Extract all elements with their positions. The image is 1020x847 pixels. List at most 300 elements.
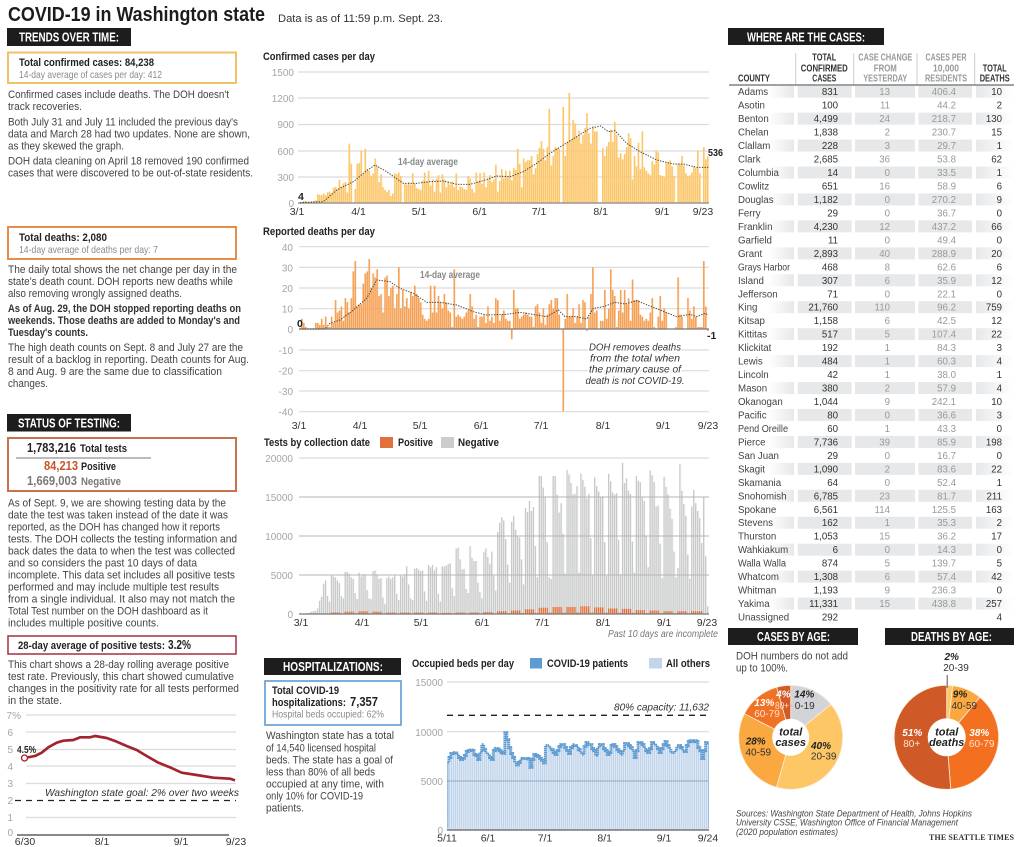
column: case change from yesterday: 8: [885, 262, 890, 273]
chart: reported deaths per day: 5/1: [413, 420, 427, 432]
chart: tests by collection date: 8/1: [596, 617, 610, 629]
column: total confirmed cases: 80: [827, 410, 839, 422]
chart: occupied beds per day: [415, 678, 718, 845]
note: cases by age: up to 100%.: [736, 662, 788, 674]
column: total confirmed cases: 11,331: [809, 599, 838, 610]
chart: occupied beds per day: 9/24: [698, 833, 718, 845]
chart: confirmed cases per day: 1500: [272, 68, 294, 79]
heading: trends over time: [7, 28, 131, 46]
column: case change from yesterday: 13: [879, 87, 890, 98]
donut chart: total deaths: 51%: [902, 728, 922, 739]
table header: TOTAL: [983, 64, 1007, 74]
heading: trends over time: TRENDS OVER TIME:: [19, 30, 119, 44]
column: case change from yesterday: 40: [879, 249, 891, 260]
chart title: confirmed cases: Confirmed cases per day: [263, 51, 376, 63]
column: total confirmed cases: 831: [822, 87, 838, 98]
chart title: reported deaths: Reported deaths per day: [263, 226, 376, 238]
column: case change from yesterday: 9: [885, 397, 890, 408]
county names: Adams: [738, 87, 768, 98]
donut chart: total cases: 40%: [810, 741, 831, 752]
chart: occupied beds per day: 15000: [415, 678, 443, 689]
column: total confirmed cases: 1,158: [814, 316, 838, 327]
callout: testing totals: [8, 438, 236, 491]
callout: total hospitalizations: Hospital beds occupied: 62%: [272, 709, 384, 721]
text block: cases notes: data and March 28 had two updates. None are shown,: [8, 128, 250, 140]
county names: Clallam: [738, 141, 770, 152]
column: case change from yesterday: 6: [885, 316, 890, 327]
text block: deaths notes: The high death counts on Sept. 8 and July 27 are the: [8, 342, 243, 354]
callout: total hospitalizations: [265, 681, 401, 725]
column: case change from yesterday: 1: [885, 357, 890, 368]
column: total confirmed cases: 192: [822, 343, 838, 354]
county names: Island: [738, 276, 764, 287]
column: total deaths: 1: [997, 370, 1002, 381]
chart: reported deaths per day: 4/1: [353, 420, 367, 432]
chart: confirmed cases per day: 600: [277, 147, 294, 158]
column: cases per 10,000 residents: 438.8: [932, 599, 956, 610]
chart: confirmed cases per day: 5/1: [412, 206, 426, 218]
chart title and legend: tests: Tests by collection date: [264, 437, 370, 449]
column: cases per 10,000 residents: 14.3: [937, 545, 956, 556]
chart: confirmed cases per day: 536: [708, 147, 723, 159]
column: cases per 10,000 residents: 96.2: [937, 303, 956, 314]
column: total confirmed cases: 100: [822, 101, 839, 112]
column: cases per 10,000 residents: 43.3: [937, 424, 956, 435]
text block: testing notes: reported, as the DOH has changed how it reports: [8, 522, 220, 534]
callout: testing totals: Negative: [81, 476, 121, 488]
column: cases per 10,000 residents: 22.1: [937, 289, 956, 300]
column: total confirmed cases: 7,736: [814, 437, 838, 448]
text block: deaths notes: Tuesday's counts.: [8, 327, 88, 339]
text block: cases notes: as they skewed the graph.: [8, 140, 124, 152]
column: cases per 10,000 residents: 36.6: [937, 410, 956, 422]
county names: Garfield: [738, 235, 772, 246]
chart: reported deaths per day: 0: [287, 325, 293, 336]
county names: Ferry: [738, 208, 761, 219]
text block: deaths notes: As of Aug. 29, the DOH stopped reporting deaths on: [8, 303, 241, 315]
column: cases per 10,000 residents: 49.4: [937, 235, 957, 246]
column: total deaths: 198: [986, 437, 1002, 448]
column: cases per 10,000 residents: 58.9: [937, 182, 956, 192]
callout: testing totals: Positive: [81, 461, 116, 473]
chart: reported deaths per day: -20: [279, 367, 293, 378]
column: total deaths: 211: [987, 491, 1002, 502]
column: total deaths: 10: [991, 397, 1003, 408]
county names: Thurston: [738, 532, 776, 543]
chart: positivity rate line: 4: [7, 762, 13, 773]
date note: Data is as of 11:59 p.m. Sept. 23.: [278, 13, 443, 25]
chart: confirmed cases per day: 0: [288, 199, 294, 210]
chart: confirmed cases per day: 9/23: [693, 206, 713, 218]
column: cases per 10,000 residents: 29.7: [937, 141, 956, 152]
text block: testing notes: date the test was taken instead of the date it was: [8, 510, 228, 522]
sources: University CSSE, Washington Office of Financial Management: [736, 818, 958, 829]
column: total confirmed cases: 1,308: [814, 572, 838, 583]
chart: reported deaths per day: 7/1: [534, 420, 548, 432]
sources: [736, 809, 972, 838]
text block: cases notes: [8, 89, 253, 180]
chart: confirmed cases per day: 8/1: [593, 206, 608, 218]
column: total deaths: 15: [991, 128, 1002, 139]
column: total confirmed cases: 21,760: [808, 303, 839, 314]
column: case change from yesterday: 0: [885, 208, 891, 219]
chart: confirmed cases per day: 300: [277, 173, 294, 184]
column: total confirmed cases: 228: [822, 141, 838, 152]
text block: deaths notes: [7, 264, 249, 390]
column: total deaths: [986, 87, 1003, 623]
county names: Douglas: [738, 195, 774, 206]
county names: Grays Harbor: [738, 262, 791, 273]
chart: occupied beds per day: 8/1: [597, 833, 612, 845]
table header: COUNTY: [738, 74, 770, 85]
donut chart: total deaths: 38%: [969, 728, 989, 739]
text block: hospital notes: patients.: [266, 802, 304, 814]
column: total confirmed cases: [808, 87, 839, 623]
column: case change from yesterday: 1: [885, 518, 890, 529]
donut chart: total deaths: 40-59: [952, 701, 978, 712]
chart: reported deaths per day: -10: [279, 346, 293, 357]
column: case change from yesterday: 2: [885, 384, 890, 394]
column: case change from yesterday: 0: [885, 451, 891, 462]
heading: where are the cases: [728, 28, 884, 45]
column: case change from yesterday: [875, 87, 891, 610]
table header: TOTAL: [812, 53, 836, 64]
text block: deaths notes: also removing wrongly assigned deaths.: [8, 288, 182, 300]
column: case change from yesterday: 15: [879, 599, 890, 610]
column: total confirmed cases: 484: [822, 357, 839, 368]
column: case change from yesterday: 0: [885, 168, 891, 179]
chart: reported deaths per day: 0: [297, 318, 303, 330]
county names: Wahkiakum: [738, 545, 788, 556]
chart: reported deaths per day: from the total when: [590, 353, 680, 365]
text block: positivity note: test rate. Previously, this chart showed cumulative: [8, 671, 234, 683]
chart: occupied beds per day: 5/11: [437, 833, 457, 845]
chart: reported deaths per day: 20: [282, 284, 293, 295]
chart: reported deaths per day: death is not COVID-19.: [586, 375, 684, 387]
county names: Grant: [738, 249, 763, 260]
chart: tests by collection date: Past 10 days are incomplete: [608, 629, 718, 640]
callout: testing totals: Total tests: [80, 443, 127, 455]
chart: positivity rate line: 3: [7, 779, 13, 790]
county names: Benton: [738, 114, 769, 125]
column: total confirmed cases: 14: [827, 168, 839, 179]
column: total deaths: 0: [997, 586, 1003, 597]
chart: tests by collection date: [265, 454, 718, 640]
chart: reported deaths per day: 8/1: [596, 420, 610, 432]
column: cases per 10,000 residents: 236.3: [932, 586, 956, 597]
column: total deaths: 1: [997, 168, 1002, 179]
chart: occupied beds per day: 10000: [415, 728, 443, 739]
text block: deaths notes: result of a backlog in reporting. Death counts for Aug.: [8, 354, 249, 366]
column: total deaths: 163: [986, 505, 1002, 516]
text block: positivity note: This chart shows a 28-day rolling average positive: [8, 659, 229, 671]
chart: positivity rate line: 1: [7, 813, 13, 824]
county names: Kitsap: [738, 316, 765, 327]
chart: confirmed cases per day: [272, 68, 723, 218]
county names: Asotin: [738, 101, 765, 112]
callout: testing totals: 84,213: [44, 459, 78, 473]
column: cases per 10,000 residents: 38.0: [937, 370, 957, 381]
column: total confirmed cases: 29: [827, 451, 838, 462]
chart: reported deaths per day: -1: [707, 330, 716, 342]
column: total deaths: 6: [997, 182, 1002, 192]
chart title and legend: occupied beds: All others: [666, 658, 710, 670]
column: cases per 10,000 residents: 60.3: [937, 357, 956, 368]
column: case change from yesterday: 1: [885, 370, 890, 381]
column: total deaths: 4: [997, 384, 1003, 394]
chart title and legend: occupied beds: Occupied beds per day: [412, 658, 515, 670]
text block: hospital notes: less than 80% of all beds: [266, 766, 375, 778]
column: total confirmed cases: 1,053: [814, 532, 838, 543]
chart: reported deaths per day: 10: [282, 305, 293, 316]
chart: occupied beds per day: 7/1: [538, 833, 552, 845]
column: case change from yesterday: 0: [885, 545, 891, 556]
table row stripes: [729, 86, 1014, 621]
text block: deaths notes: state's death count. DOH reports new deaths while: [8, 276, 233, 288]
callout: 28-day average: 28-day average of positive tests:: [18, 640, 165, 652]
column: total confirmed cases: 162: [822, 518, 838, 529]
text block: hospital notes: only 10% for COVID-19: [266, 790, 363, 802]
chart: tests by collection date: 9/23: [697, 617, 717, 629]
text block: cases notes: track recoveries.: [8, 101, 82, 113]
column: total confirmed cases: 2,685: [814, 155, 838, 166]
chart title and legend: tests: Negative: [458, 437, 499, 449]
county names: [738, 87, 791, 623]
county names: Pend Oreille: [738, 424, 788, 435]
column: case change from yesterday: 2: [885, 128, 890, 139]
column: case change from yesterday: 1: [885, 424, 890, 435]
column: cases per 10,000 residents: 242.1: [932, 397, 956, 408]
chart: tests by collection date: 3/1: [294, 617, 308, 629]
donut chart: total cases: 14%: [794, 690, 814, 701]
text block: testing notes: As of Sept. 9, we are showing testing data by the: [8, 498, 226, 510]
county names: Snohomish: [738, 491, 786, 502]
chart: reported deaths per day: 3/1: [292, 420, 306, 432]
heading: hospitalizations: HOSPITALIZATIONS:: [283, 660, 383, 674]
county names: Stevens: [738, 518, 773, 529]
callout: 28-day average: 3.2%: [168, 638, 191, 652]
county names: Lewis: [738, 357, 763, 368]
column: total confirmed cases: 4,230: [814, 222, 839, 233]
column: case change from yesterday: 36: [879, 155, 890, 166]
column: cases per 10,000 residents: 42.5: [937, 316, 956, 327]
text block: testing notes: and so considers the past 10 days of data: [8, 558, 198, 570]
chart: reported deaths per day: 9/23: [698, 420, 718, 432]
county names: Jefferson: [738, 289, 778, 300]
note: cases by age: DOH numbers do not add: [736, 650, 848, 662]
chart: confirmed cases per day: 1200: [272, 94, 294, 105]
text block: testing notes: includes multiple positive counts.: [8, 618, 159, 630]
note: cases by age: [736, 650, 848, 674]
column: case change from yesterday: 11: [880, 101, 890, 112]
county names: King: [738, 303, 757, 314]
column: total deaths: 12: [991, 316, 1002, 327]
column: total deaths: 17: [991, 532, 1002, 543]
column: total deaths: 0: [997, 545, 1003, 556]
column: case change from yesterday: 6: [885, 276, 890, 287]
chart: confirmed cases per day: 7/1: [532, 206, 546, 218]
county names: Columbia: [738, 168, 780, 179]
sources: Sources: Washington State Department of Health, Johns Hopkins: [736, 809, 972, 820]
column: cases per 10,000 residents: 288.9: [932, 249, 956, 260]
column: cases per 10,000 residents: 62.6: [937, 262, 956, 273]
chart: tests by collection date: 5/1: [414, 617, 428, 629]
column: total deaths: 0: [997, 289, 1003, 300]
text block: testing notes: from a single individual. It also may not match the: [8, 594, 235, 606]
column: total deaths: 4: [997, 612, 1003, 624]
text block: hospital notes: Washington state has a total: [266, 730, 394, 742]
column: case change from yesterday: 6: [885, 572, 890, 583]
text block: deaths notes: The daily total shows the net change per day in the: [8, 264, 237, 276]
chart: reported deaths per day: the primary cause of: [589, 364, 682, 376]
donut chart: total cases: total: [779, 726, 803, 738]
heading: where are the cases: WHERE ARE THE CASES:: [747, 30, 865, 44]
column: cases per 10,000 residents: [932, 87, 957, 610]
column: total confirmed cases: 64: [827, 478, 839, 489]
chart: tests by collection date: 9/1: [657, 617, 671, 629]
column: cases per 10,000 residents: 218.7: [932, 114, 956, 125]
credit: The Seattle Times: THE SEATTLE TIMES: [929, 833, 1015, 842]
chart title and legend: occupied beds: [412, 658, 710, 670]
column: total deaths: 0: [997, 235, 1003, 246]
chart: tests by collection date: 0: [287, 610, 293, 621]
table header: 10,000: [933, 64, 959, 74]
county names: Lincoln: [738, 370, 769, 381]
chart title and legend: tests: Positive: [398, 437, 433, 449]
text block: deaths notes: changes.: [8, 378, 48, 390]
column: total deaths: 3: [997, 410, 1002, 422]
county names: Skagit: [738, 464, 765, 475]
column: total confirmed cases: 1,182: [814, 195, 838, 206]
text block: testing notes: Total Test number on the DOH dashboard as it: [8, 606, 208, 618]
column: total deaths: 20: [991, 249, 1003, 260]
column: total deaths: 22: [991, 330, 1002, 341]
text block: hospital notes: of 14,540 licensed hospital: [266, 742, 376, 754]
chart: reported deaths per day: DOH removes deaths: [589, 342, 682, 354]
column: total deaths: 6: [997, 262, 1002, 273]
column: cases per 10,000 residents: 57.9: [937, 384, 956, 394]
column: case change from yesterday: 5: [885, 559, 890, 570]
chart: reported deaths per day: 14-day average: [420, 270, 480, 281]
chart: reported deaths per day: 30: [282, 264, 293, 275]
text block: hospital notes: occupied at any time, with: [266, 778, 384, 790]
chart: positivity rate line: 6: [7, 728, 13, 739]
chart: positivity rate line: Washington state goal: 2% over two weeks: [45, 787, 240, 799]
text block: cases notes: Confirmed cases include deaths. The DOH doesn't: [8, 89, 229, 101]
heading: deaths by age: [885, 628, 1014, 645]
heading: cases by age: [728, 628, 858, 645]
callout: total confirmed cases: [8, 52, 236, 83]
column: cases per 10,000 residents: 35.3: [937, 518, 956, 529]
heading: hospitalizations: [264, 658, 401, 675]
text block: testing notes: back dates the data to when the test was collected: [8, 546, 235, 558]
column: cases per 10,000 residents: 44.2: [937, 101, 956, 112]
column: cases per 10,000 residents: 107.4: [932, 330, 957, 341]
chart: tests by collection date: 6/1: [475, 617, 489, 629]
column: total deaths: 42: [991, 572, 1002, 583]
chart: reported deaths per day: 40: [282, 243, 293, 254]
text block: testing notes: [8, 498, 237, 630]
column: cases per 10,000 residents: 125.5: [932, 505, 956, 516]
county names: Kittitas: [738, 330, 767, 341]
donut chart: total cases: cases: [775, 737, 806, 749]
column: cases per 10,000 residents: 81.7: [937, 491, 956, 502]
table header: CASES: [812, 74, 837, 85]
chart title and legend: tests: [264, 437, 499, 449]
column: case change from yesterday: 9: [885, 586, 890, 597]
column: case change from yesterday: 23: [879, 491, 890, 502]
column: total confirmed cases: 468: [822, 262, 838, 273]
chart: occupied beds per day: 9/1: [657, 833, 671, 845]
table header: CASES PER: [926, 53, 967, 64]
chart: reported deaths per day: [279, 243, 718, 432]
chart: tests by collection date: 20000: [265, 454, 293, 465]
column: case change from yesterday: 3: [885, 141, 890, 152]
column: total deaths: 2: [997, 101, 1002, 112]
column: case change from yesterday: 110: [875, 303, 891, 314]
column: total confirmed cases: 651: [822, 182, 838, 192]
donut chart: total cases: 13%: [754, 698, 774, 709]
county names: Franklin: [738, 222, 772, 233]
column: total deaths: 4: [997, 357, 1003, 368]
column: total confirmed cases: 60: [827, 424, 839, 435]
donut chart: total cases: 0-19: [795, 701, 815, 712]
column: total confirmed cases: 380: [822, 384, 839, 394]
column: case change from yesterday: 0: [885, 235, 891, 246]
column: total confirmed cases: 11: [828, 235, 838, 246]
callout: total deaths: [8, 227, 236, 259]
table header: CASE CHANGE: [858, 53, 913, 64]
donut chart: total deaths: total: [935, 726, 959, 738]
text block: positivity note: in the state.: [8, 695, 62, 707]
table header: CONFIRMED: [801, 64, 848, 74]
donut chart: total deaths: [894, 652, 999, 789]
donut chart: total cases: 80+: [775, 701, 789, 712]
column: case change from yesterday: 0: [885, 410, 891, 422]
column: total deaths: 0: [997, 451, 1003, 462]
donut chart: total cases: 40-59: [746, 748, 772, 759]
chart: reported deaths per day: 9/1: [656, 420, 670, 432]
chart: occupied beds per day: 5000: [421, 777, 443, 788]
county names: Klickitat: [738, 343, 772, 354]
column: total confirmed cases: 307: [822, 276, 838, 287]
donut chart: total deaths: 80+: [903, 739, 920, 750]
county names: Pierce: [738, 437, 765, 448]
county names: Clark: [738, 155, 761, 166]
column: case change from yesterday: 5: [885, 330, 890, 341]
donut chart: total deaths: deaths: [929, 737, 964, 749]
column: cases per 10,000 residents: 84.3: [937, 343, 956, 354]
county names: Whitman: [738, 586, 776, 597]
county names: Unassigned: [738, 612, 789, 624]
column: cases per 10,000 residents: 16.7: [937, 451, 956, 462]
chart: positivity rate line: 2: [7, 796, 13, 807]
donut chart: total cases: [739, 685, 843, 789]
chart: confirmed cases per day: 900: [277, 120, 294, 131]
column: cases per 10,000 residents: 139.7: [932, 559, 956, 570]
column: case change from yesterday: 12: [879, 222, 890, 233]
column: total confirmed cases: 71: [827, 289, 838, 300]
text block: cases notes: Both July 31 and July 11 included the previous day's: [8, 116, 238, 128]
column: total confirmed cases: 1,838: [814, 128, 838, 139]
county names: Chelan: [738, 128, 769, 139]
column: total deaths: 257: [986, 599, 1002, 610]
callout: total hospitalizations: Total COVID-19: [272, 685, 339, 697]
callout: total deaths: Total deaths: 2,080: [19, 232, 107, 244]
chart: confirmed cases per day: 4/1: [351, 206, 366, 218]
callout: total deaths: 14-day average of deaths per day: 7: [19, 244, 158, 256]
table header: YESTERDAY: [863, 74, 908, 85]
